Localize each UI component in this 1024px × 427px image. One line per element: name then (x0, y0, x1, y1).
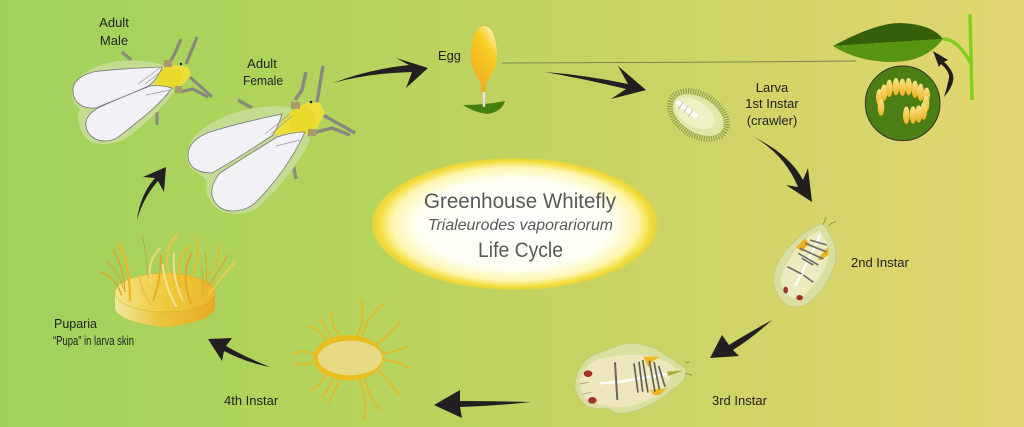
arrow: second to third instar (710, 320, 772, 358)
adult male label: Adult (99, 15, 129, 30)
first instar larva (663, 83, 734, 147)
puparia label (53, 316, 134, 348)
puparia label: Puparia (54, 316, 98, 331)
arrow: first to second instar (754, 137, 812, 202)
adult female whitefly (187, 66, 355, 214)
arrow: inset to leaf (933, 51, 953, 97)
inset: eggs on leaf (865, 66, 940, 141)
egg label: Egg (438, 48, 461, 63)
egg cluster (876, 78, 930, 124)
icon: leaf on stem (833, 14, 972, 100)
waxy filaments (293, 300, 410, 420)
adult male label: Male (100, 33, 128, 48)
fourth instar label: 4th Instar (224, 393, 279, 408)
title: Greenhouse Whitefly (424, 190, 616, 213)
adult male label (99, 15, 129, 48)
fourth instar larva (293, 300, 410, 420)
first instar label: 1st Instar (745, 96, 799, 111)
puparia (99, 234, 235, 327)
first instar label: (crawler) (747, 113, 797, 128)
subtitle: Life Cycle (478, 239, 563, 262)
scientific name: Trialeurodes vaporariorum (428, 217, 613, 234)
adult male whitefly (72, 37, 212, 144)
first instar label (745, 80, 799, 128)
filaments (99, 234, 235, 307)
adult female label (243, 56, 283, 88)
adult female label: Adult (247, 56, 277, 71)
line from egg to leaf (502, 61, 856, 63)
arrow: fourth instar to puparia (208, 338, 270, 367)
arrow: puparia to adult (137, 167, 166, 220)
first instar label: Larva (756, 80, 789, 95)
icon: egg on leaf (463, 26, 505, 114)
third instar label: 3rd Instar (712, 393, 768, 408)
title oval (372, 158, 658, 290)
adult female label: Female (243, 73, 283, 88)
second instar label: 2nd Instar (851, 255, 909, 270)
arrow: egg to first instar (545, 66, 646, 99)
arrow: adult to egg (333, 58, 428, 88)
arrow: third to fourth instar (434, 390, 531, 418)
third instar larva (575, 343, 692, 413)
puparia label: “Pupa” in larva skin (53, 333, 134, 348)
second instar larva (773, 217, 836, 307)
